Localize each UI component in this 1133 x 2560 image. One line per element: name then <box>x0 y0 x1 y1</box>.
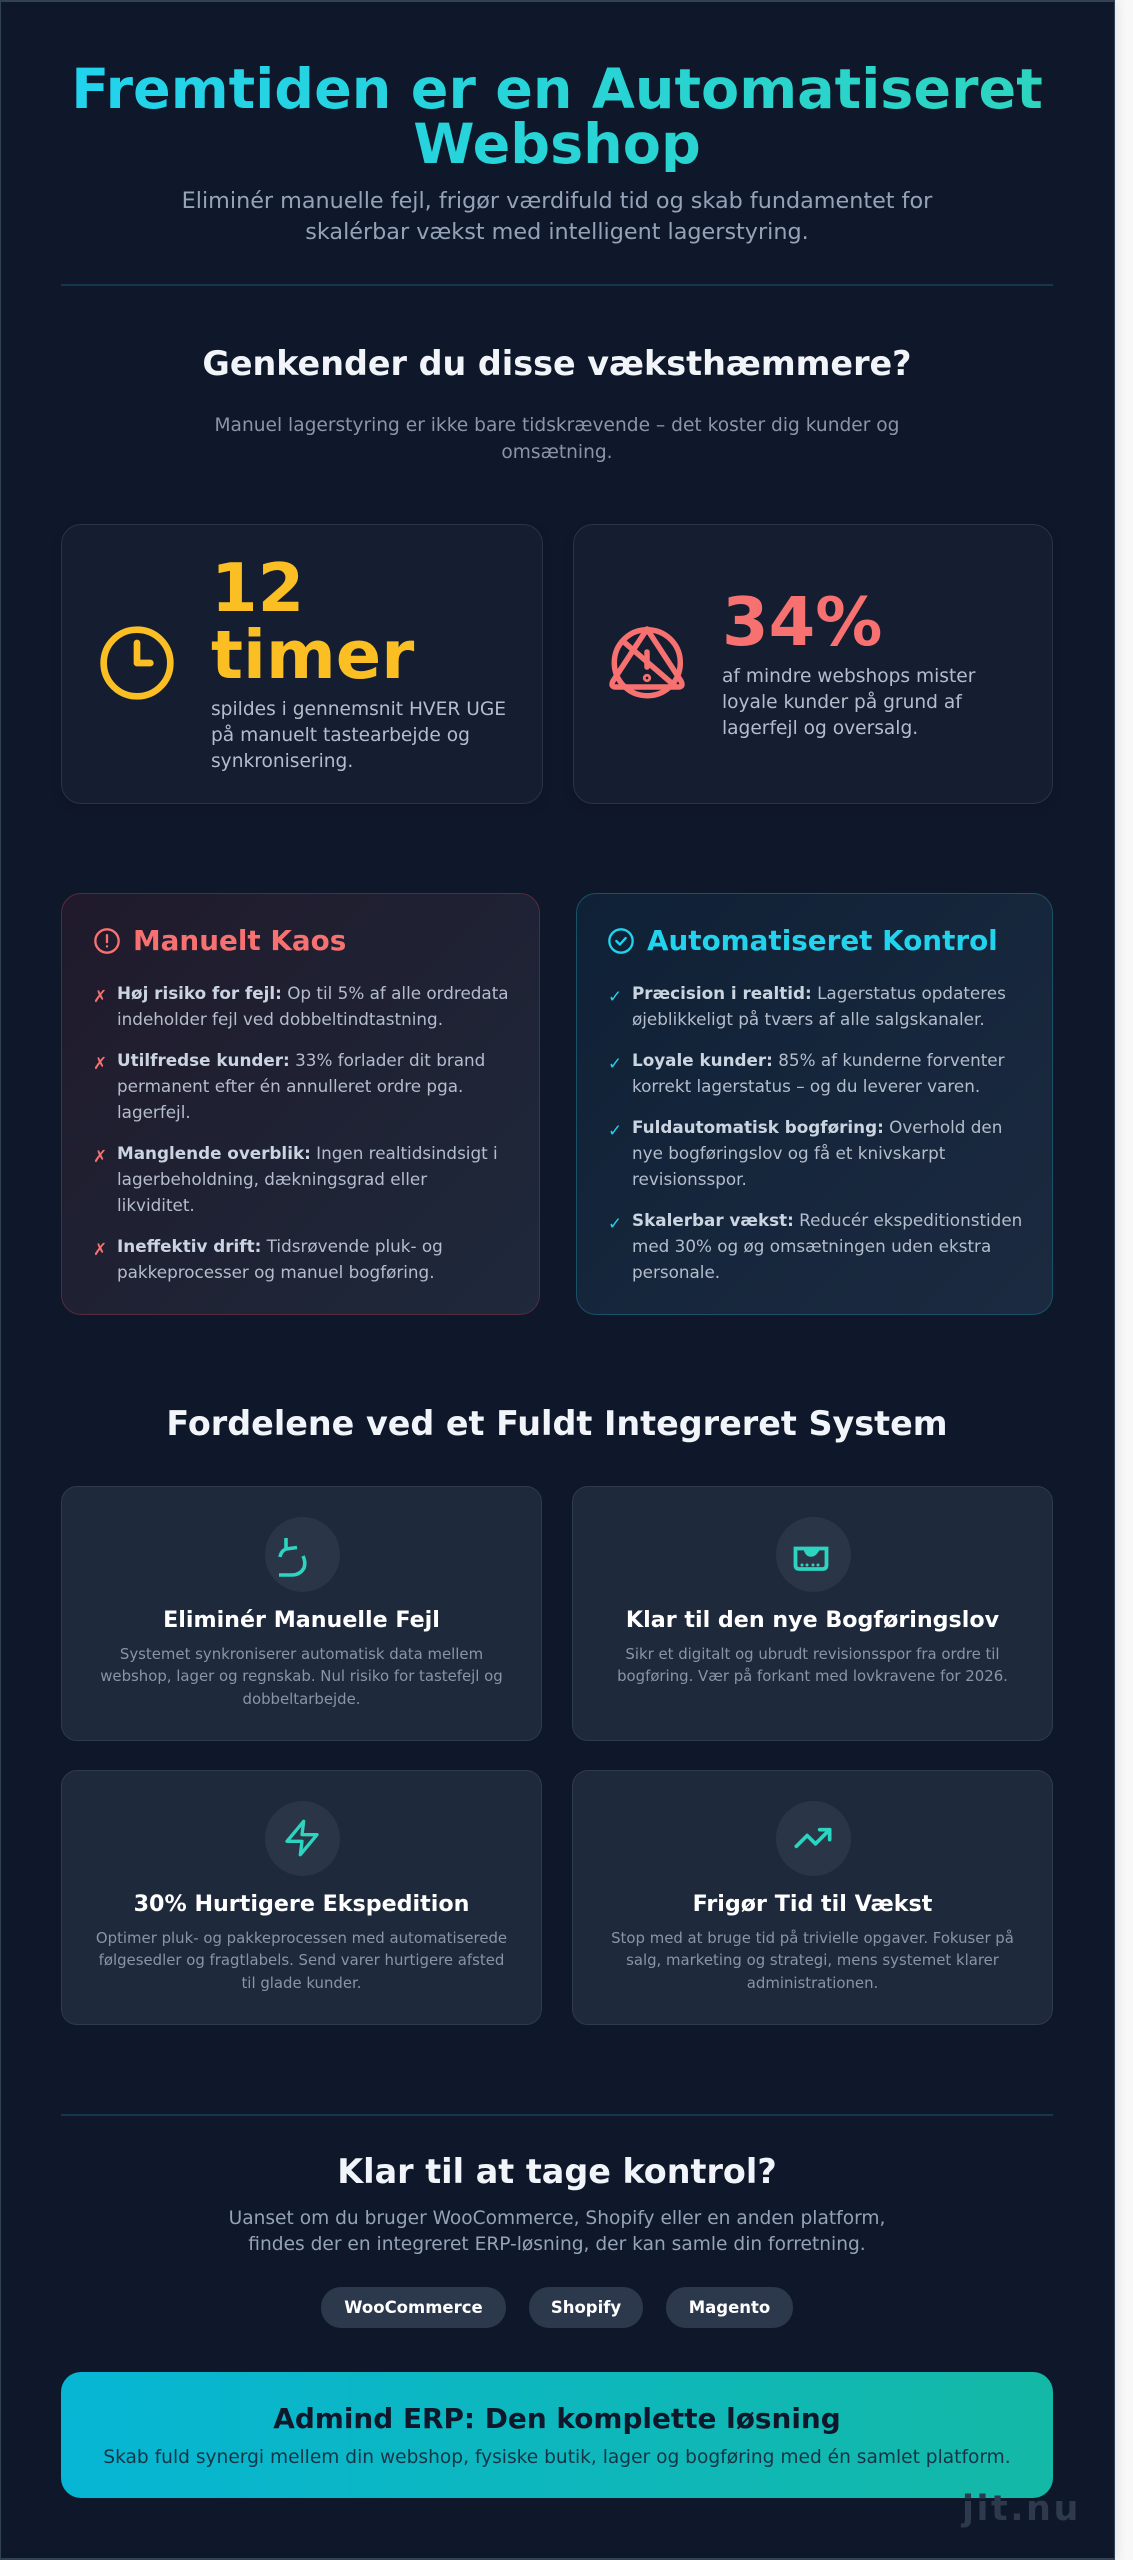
tag: WooCommerce: WooCommerce <box>344 2298 483 2317</box>
item: loyale kunder: Loyale kunder: 85% af kunderne forventer <box>632 1050 1005 1070</box>
item: høj risiko: indeholder fejl ved dobbeltindtastning. <box>117 1009 443 1029</box>
panel: stat 12 timer <box>61 524 543 804</box>
subtitle: Eliminér manuelle fejl, frigør værdifuld tid og skab fundamentet for <box>182 188 932 214</box>
panel: hurtigere ekspedition <box>61 1770 542 2025</box>
item: manglende overblik <box>117 1143 498 1215</box>
stat number: 12 timer: timer <box>211 616 414 694</box>
subtitle: skalérbar vækst med intelligent lagerstyring. <box>305 219 809 245</box>
item: skalerbar vækst: personale. <box>632 1262 720 1282</box>
item: ineffektiv drift: Ineffektiv drift: Tidsrøvende pluk- og <box>117 1236 443 1256</box>
icon circle <box>265 1517 340 1592</box>
item: manglende overblik: likviditet. <box>117 1195 195 1215</box>
heading: væksthæmmere: Genkender du disse væksthæmmere? <box>202 344 912 383</box>
heading: fordelene: Fordelene ved et Fuldt Integreret System <box>166 1404 948 1443</box>
item mark: ✓ <box>608 1213 622 1233</box>
benefit text: Stop med at bruge tid på trivielle opgaver. Fokuser på <box>611 1929 1014 1947</box>
closing text <box>229 2208 885 2255</box>
heading: automatiseret kontrol: Automatiseret Kontrol <box>647 924 998 957</box>
stat description: 34%: lagerfejl og oversalg. <box>722 718 918 739</box>
item mark: ✗ <box>93 1053 107 1073</box>
benefit title: Frigør Tid til Vækst <box>693 1891 932 1917</box>
icon: alert circle <box>94 928 120 954</box>
benefit text: salg, marketing og strategi, mens systemet klarer <box>626 1951 999 1969</box>
intro text: Manuel lagerstyring er ikke bare tidskrævende – det koster dig kunder og <box>215 415 899 436</box>
subtitle <box>182 188 932 245</box>
item: loyale kunder <box>632 1050 1005 1096</box>
item: utilfredse kunder <box>117 1050 485 1122</box>
benefit text: webshop, lager og regnskab. Nul risiko for tastefejl og <box>100 1667 503 1685</box>
benefit text: bogføring. Vær på forkant med lovkravene for 2026. <box>617 1667 1008 1685</box>
icon: trend up <box>794 1828 832 1848</box>
benefit title: Klar til den nye Bogføringslov <box>626 1607 999 1633</box>
stat description: 12 timer: på manuelt tastearbejde og <box>211 725 470 746</box>
item: fuldautomatisk bogføring: nye bogføringslov og få et knivskarpt <box>632 1143 945 1163</box>
icon: refresh <box>278 1538 307 1577</box>
watermark: jit.nu <box>962 2489 1081 2529</box>
tag: Magento: Magento <box>689 2298 770 2317</box>
panel: eliminér manuelle fejl <box>61 1486 542 1741</box>
icon circle <box>776 1517 851 1592</box>
icon: clock <box>100 626 174 700</box>
item: høj risiko: Høj risiko for fejl: Op til 5% af alle ordredata <box>117 983 509 1003</box>
item mark: ✓ <box>608 1120 622 1140</box>
intro text: omsætning. <box>501 442 613 463</box>
tag: Shopify: Shopify <box>551 2298 621 2317</box>
benefit text: Systemet synkroniserer automatisk data mellem <box>120 1645 483 1663</box>
item: fuldautomatisk bogføring: revisionsspor. <box>632 1169 747 1189</box>
item: ineffektiv drift <box>117 1236 443 1282</box>
item: manglende overblik: Manglende overblik: Ingen realtidsindsigt i <box>117 1143 498 1163</box>
stat number: 12 timer: 12 <box>211 549 304 627</box>
panel: bogføringslov <box>572 1486 1053 1741</box>
item: fuldautomatisk bogføring <box>632 1117 1002 1189</box>
panel: frigør tid <box>572 1770 1053 2025</box>
item: præcision: Præcision i realtid: Lagerstatus opdateres <box>632 983 1006 1003</box>
callout title: Admind ERP: Den komplette løsning <box>273 2402 841 2435</box>
benefit title: 30% Hurtigere Ekspedition <box>134 1891 469 1917</box>
item mark: ✓ <box>608 1053 622 1073</box>
intro text <box>215 415 899 463</box>
title: Webshop <box>413 112 701 177</box>
benefit text <box>611 1929 1014 1992</box>
title <box>60 62 1054 172</box>
tag: Magento <box>666 2287 793 2328</box>
panel: automatiseret kontrol <box>576 893 1053 1315</box>
list: automatiseret kontrol <box>608 983 1022 1282</box>
stat number: 12 timer <box>211 549 414 694</box>
benefit text: Optimer pluk- og pakkeprocessen med automatiserede <box>96 1929 507 1947</box>
stat description: 12 timer: spildes i gennemsnit HVER UGE <box>211 699 506 720</box>
tag: Shopify <box>529 2287 643 2328</box>
title: Fremtiden er en Automatiseret <box>71 57 1043 122</box>
item mark: ✗ <box>93 986 107 1006</box>
panel: manuelt kaos <box>61 893 540 1315</box>
icon: check circle <box>608 928 634 954</box>
stat description: 34%: af mindre webshops mister <box>722 666 975 687</box>
panel: stat 34% <box>573 524 1053 804</box>
icon: warning <box>609 626 685 698</box>
callout: Admind ERP <box>61 2372 1053 2498</box>
callout text: Skab fuld synergi mellem din webshop, fysiske butik, lager og bogføring med én samlet platform. <box>103 2447 1011 2468</box>
item: loyale kunder: korrekt lagerstatus – og du leverer varen. <box>632 1076 980 1096</box>
list: manuelt kaos <box>93 983 509 1282</box>
benefit text: dobbeltarbejde. <box>243 1690 360 1708</box>
item mark: ✗ <box>93 1146 107 1166</box>
item: ineffektiv drift: pakkeprocesser og manuel bogføring. <box>117 1262 435 1282</box>
stat description: 12 timer <box>211 699 506 772</box>
item: præcision: øjeblikkeligt på tværs af alle salgskanaler. <box>632 1009 985 1029</box>
item: skalerbar vækst <box>632 1210 1022 1282</box>
closing text: Uanset om du bruger WooCommerce, Shopify eller en anden platform, <box>229 2208 885 2229</box>
stat description: 34% <box>722 666 976 739</box>
stat description: 34%: loyale kunder på grund af <box>722 692 962 713</box>
benefit text <box>100 1645 503 1708</box>
item: præcision <box>632 983 1006 1029</box>
item: høj risiko <box>117 983 509 1029</box>
item: utilfredse kunder: lagerfejl. <box>117 1102 191 1122</box>
item mark: ✗ <box>93 1239 107 1259</box>
stat description: 12 timer: synkronisering. <box>211 751 353 772</box>
benefit text <box>617 1645 1008 1685</box>
benefit text: Sikr et digitalt og ubrudt revisionsspor fra ordre til <box>625 1645 1000 1663</box>
icon: ledger <box>794 1546 828 1571</box>
tag: WooCommerce <box>321 2287 506 2328</box>
stat number: 34%: 34% <box>722 583 882 661</box>
benefit text: til glade kunder. <box>241 1974 362 1992</box>
item: skalerbar vækst: med 30% og øg omsætningen uden ekstra <box>632 1236 991 1256</box>
benefit title: Eliminér Manuelle Fejl <box>163 1607 440 1633</box>
item: manglende overblik: lagerbeholdning, dækningsgrad eller <box>117 1169 427 1189</box>
icon circle <box>265 1801 340 1876</box>
icon circle <box>776 1801 851 1876</box>
benefit text <box>96 1929 507 1992</box>
heading: klar til kontrol: Klar til at tage kontrol? <box>337 2152 777 2191</box>
item: fuldautomatisk bogføring: Fuldautomatisk bogføring: Overhold den <box>632 1117 1002 1137</box>
item: utilfredse kunder: Utilfredse kunder: 33% forlader dit brand <box>117 1050 485 1070</box>
item: skalerbar vækst: Skalerbar vækst: Reducér ekspeditionstiden <box>632 1210 1022 1230</box>
icon: bolt <box>285 1820 319 1856</box>
closing text: findes der en integreret ERP-løsning, der kan samle din forretning. <box>248 2234 866 2255</box>
benefit text: administrationen. <box>747 1974 878 1992</box>
item: utilfredse kunder: permanent efter én annulleret ordre pga. <box>117 1076 463 1096</box>
heading: manuelt kaos: Manuelt Kaos <box>133 924 346 957</box>
benefit text: følgesedler og fragtlabels. Send varer hurtigere afsted <box>99 1951 504 1969</box>
item mark: ✓ <box>608 986 622 1006</box>
